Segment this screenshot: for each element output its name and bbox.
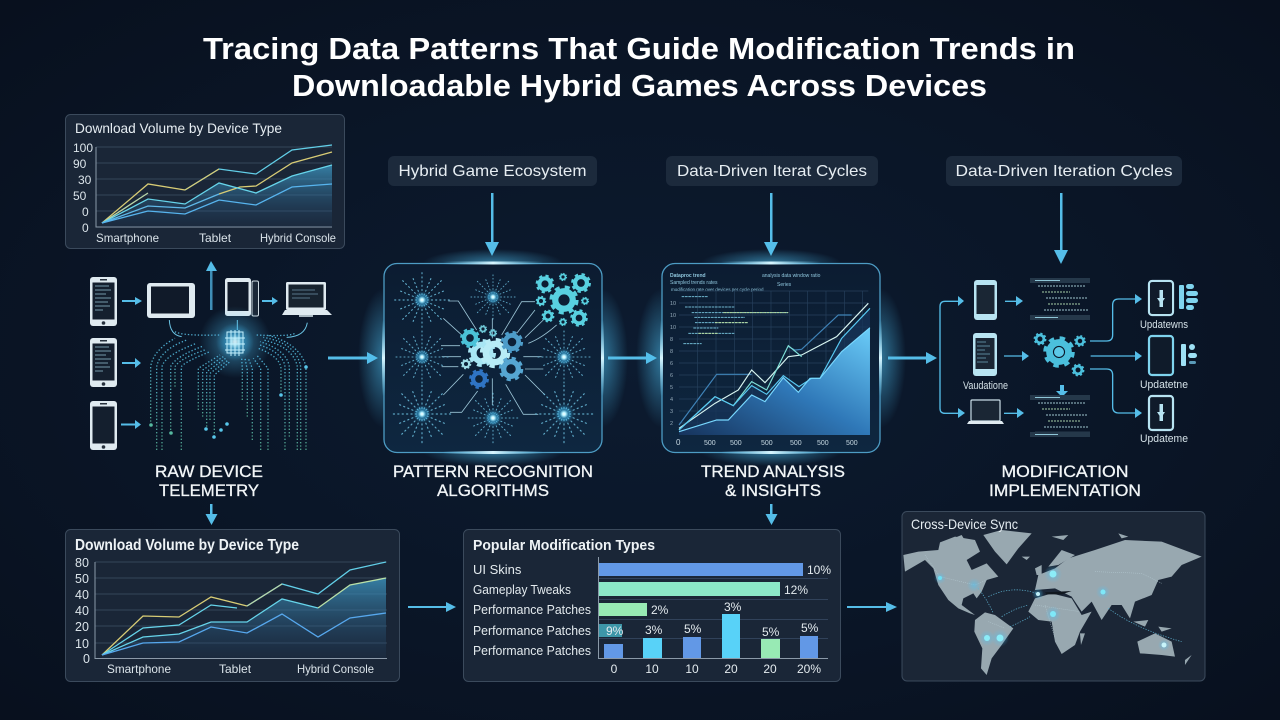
bottom chart axis labels: 40 [75, 604, 89, 618]
update device 2 [1140, 336, 1197, 391]
top chart axis labels: 90 [73, 157, 87, 171]
chart header snippets: Dataproc trend [670, 273, 706, 279]
title [203, 31, 1075, 103]
top chart axis labels: Tablet [199, 231, 232, 245]
vertical bars [604, 614, 818, 658]
label pill: hybrid game ecosystem: Hybrid Game Ecosystem [398, 163, 586, 180]
arrow: trend analysis to implementation [888, 352, 937, 364]
panel: trend analysis chart: 4 [670, 397, 673, 403]
panel: trend analysis chart: 6 [670, 361, 673, 367]
category labels: Performance Patches [473, 623, 591, 638]
axis tick labels: 20% [797, 662, 821, 676]
panel: popular modification types [464, 530, 840, 682]
axis tick labels [611, 662, 821, 676]
axis tick labels: 20 [724, 662, 738, 676]
category labels: Performance Patches [473, 602, 591, 617]
panel: trend analysis chart: 10 [670, 313, 676, 319]
update device 3: Updateme [1140, 433, 1188, 445]
arrows: stage labels down to bottom panels [206, 504, 778, 525]
label pill: iteration cycles right [946, 156, 1182, 186]
chart heading: Popular Modification Types [473, 537, 655, 554]
icon: implementation phone with code [973, 333, 997, 376]
arrows: pills down to panels [485, 193, 1068, 264]
top chart axis labels: 0 [82, 205, 89, 219]
value labels: 10% [807, 563, 831, 577]
chart heading: Download Volume by Device Type [75, 537, 299, 554]
label pill: hybrid game ecosystem [388, 156, 597, 186]
bottom chart axis labels [75, 556, 374, 676]
text: validation label: Vaudatione [963, 380, 1008, 392]
value labels: 12% [784, 583, 808, 597]
icon: tablet [147, 283, 195, 318]
trend chart axis labels: 500 [704, 440, 716, 447]
panel: trend analysis chart: 8 [670, 349, 673, 355]
bottom chart axis labels: 40 [75, 588, 89, 602]
connector lines [441, 301, 557, 414]
stage labels: TREND ANALYSIS [701, 462, 845, 481]
icon: laptop [282, 282, 332, 317]
icon: phone 3 [90, 401, 117, 450]
top chart axis labels [73, 141, 336, 245]
map continents [903, 530, 1202, 675]
trend chart axis labels [676, 438, 858, 447]
stage labels: IMPLEMENTATION [989, 481, 1141, 500]
value labels: 5% [762, 625, 780, 639]
map heading: Cross-Device Sync [911, 516, 1018, 532]
diagram: telemetry data streams and chip [149, 306, 308, 450]
category labels: Gameplay Tweaks [473, 582, 571, 597]
panel: download volume chart top [66, 114, 344, 248]
top chart axis labels: 30 [78, 173, 92, 187]
panel: trend analysis chart: 10 [670, 301, 676, 307]
bottom chart axis labels: Tablet [219, 662, 252, 676]
label pill: iteration cycles middle [666, 156, 878, 186]
category labels [473, 562, 591, 658]
update device 1 [1140, 281, 1198, 331]
value labels: 5% [684, 622, 702, 636]
stage labels: PATTERN RECOGNITION [393, 462, 593, 481]
panel: trend analysis chart: 3 [670, 409, 673, 415]
stage labels: MODIFICATION [1002, 462, 1128, 481]
trend chart axis labels: 500 [790, 440, 802, 447]
category labels: UI Skins [473, 562, 522, 577]
icon: implementation laptop [967, 400, 1004, 424]
icon: implementation phone [974, 280, 997, 320]
branch connectors [940, 299, 1135, 413]
panel: download volume chart bottom [66, 530, 400, 682]
chart header snippets: modification rate over devices per cycle period [671, 287, 764, 292]
trend chart axis labels: 500 [761, 440, 773, 447]
trend chart axis labels: 500 [817, 440, 829, 447]
code block lower [1030, 395, 1090, 437]
horizontal bars [599, 563, 803, 637]
panel: cross-device sync map [902, 512, 1205, 681]
chart heading: Download Volume by Device Type [75, 120, 282, 136]
top chart axis labels: 50 [73, 189, 87, 203]
stage labels: & INSIGHTS [725, 481, 821, 500]
bottom chart axis labels: 80 [75, 556, 89, 570]
value labels: 5% [801, 621, 819, 635]
category labels: Performance Patches [473, 643, 591, 658]
map sync nodes [934, 565, 1170, 651]
bottom chart axis labels: Smartphone [107, 662, 171, 676]
top chart axis labels: Hybrid Console [260, 231, 336, 245]
panel: trend analysis chart: 2 [670, 421, 673, 427]
panel: trend analysis chart: 5 [670, 385, 673, 391]
bottom chart axis labels: Hybrid Console [297, 662, 374, 676]
arrow: chart to modification types [408, 602, 456, 612]
panel: trend analysis chart: 10 [670, 325, 676, 331]
icon group: source devices [90, 277, 332, 450]
value labels [606, 563, 831, 639]
code block upper [1030, 278, 1090, 320]
label pill: iteration cycles right: Data-Driven Iteration Cycles [956, 163, 1172, 180]
trend chart axis labels: 500 [730, 440, 742, 447]
stage labels [155, 462, 1141, 500]
bottom chart axis labels: 0 [83, 652, 90, 666]
gear cluster centre [462, 326, 522, 388]
panel edge glows [382, 262, 604, 454]
top chart axis labels: Smartphone [96, 231, 159, 245]
panel edge glows [660, 262, 882, 454]
arrow: pattern recognition to trend analysis [608, 352, 657, 364]
chart header snippets: Series [777, 282, 792, 288]
title: Tracing Data Patterns That Guide Modification Trends in [203, 31, 1075, 66]
icon: phone 1 [90, 277, 117, 326]
arrows: device inputs [121, 297, 278, 429]
diagram: modification implementation [940, 278, 1198, 445]
value labels: 9% [606, 624, 624, 638]
chart header snippets [670, 273, 821, 292]
trend chart axis labels: 500 [846, 440, 858, 447]
top chart axis labels: 0 [82, 221, 89, 235]
arrow: modification types to sync map [847, 602, 897, 612]
label pill: iteration cycles middle: Data-Driven Iterat Cycles [677, 163, 867, 180]
chart header snippets: analysis data window ratio [762, 273, 821, 279]
value labels: 3% [724, 600, 742, 614]
panel: trend analysis chart [636, 249, 906, 466]
arrow: telemetry to pattern recognition [328, 352, 378, 364]
trend chart axis labels: 0 [676, 438, 681, 447]
value labels: 2% [651, 603, 669, 617]
bottom chart axis labels: 20 [75, 620, 89, 634]
stage labels: RAW DEVICE [155, 462, 263, 481]
axis tick labels: 20 [763, 662, 777, 676]
icon: small tablet [225, 278, 258, 316]
bottom chart axis labels: 10 [75, 637, 89, 651]
gear cluster top right [536, 274, 590, 326]
panel: trend analysis chart: 6 [670, 373, 673, 379]
top chart axis labels: 100 [73, 141, 93, 155]
stage labels: TELEMETRY [159, 481, 259, 500]
pattern bursts [393, 273, 593, 443]
axis tick labels: 10 [685, 662, 699, 676]
bottom chart axis labels: 50 [75, 572, 89, 586]
update device 3 [1140, 396, 1188, 445]
title: Downloadable Hybrid Games Across Devices [292, 68, 987, 103]
panel: trend analysis chart: 8 [670, 337, 673, 343]
axis tick labels: 10 [645, 662, 659, 676]
stage labels: ALGORITHMS [437, 481, 549, 500]
value labels: 3% [645, 623, 663, 637]
icon: processing gears [1034, 334, 1085, 376]
axis tick labels: 0 [611, 662, 618, 676]
panel: pattern recognition [358, 249, 628, 466]
chart header snippets: Sampled trends rates [670, 280, 718, 286]
icon: phone 2 [90, 338, 117, 387]
update device 2: Updatetne [1140, 379, 1188, 391]
update device 1: Updatewns [1140, 319, 1188, 331]
arrow: telemetry up to top chart [206, 261, 217, 310]
